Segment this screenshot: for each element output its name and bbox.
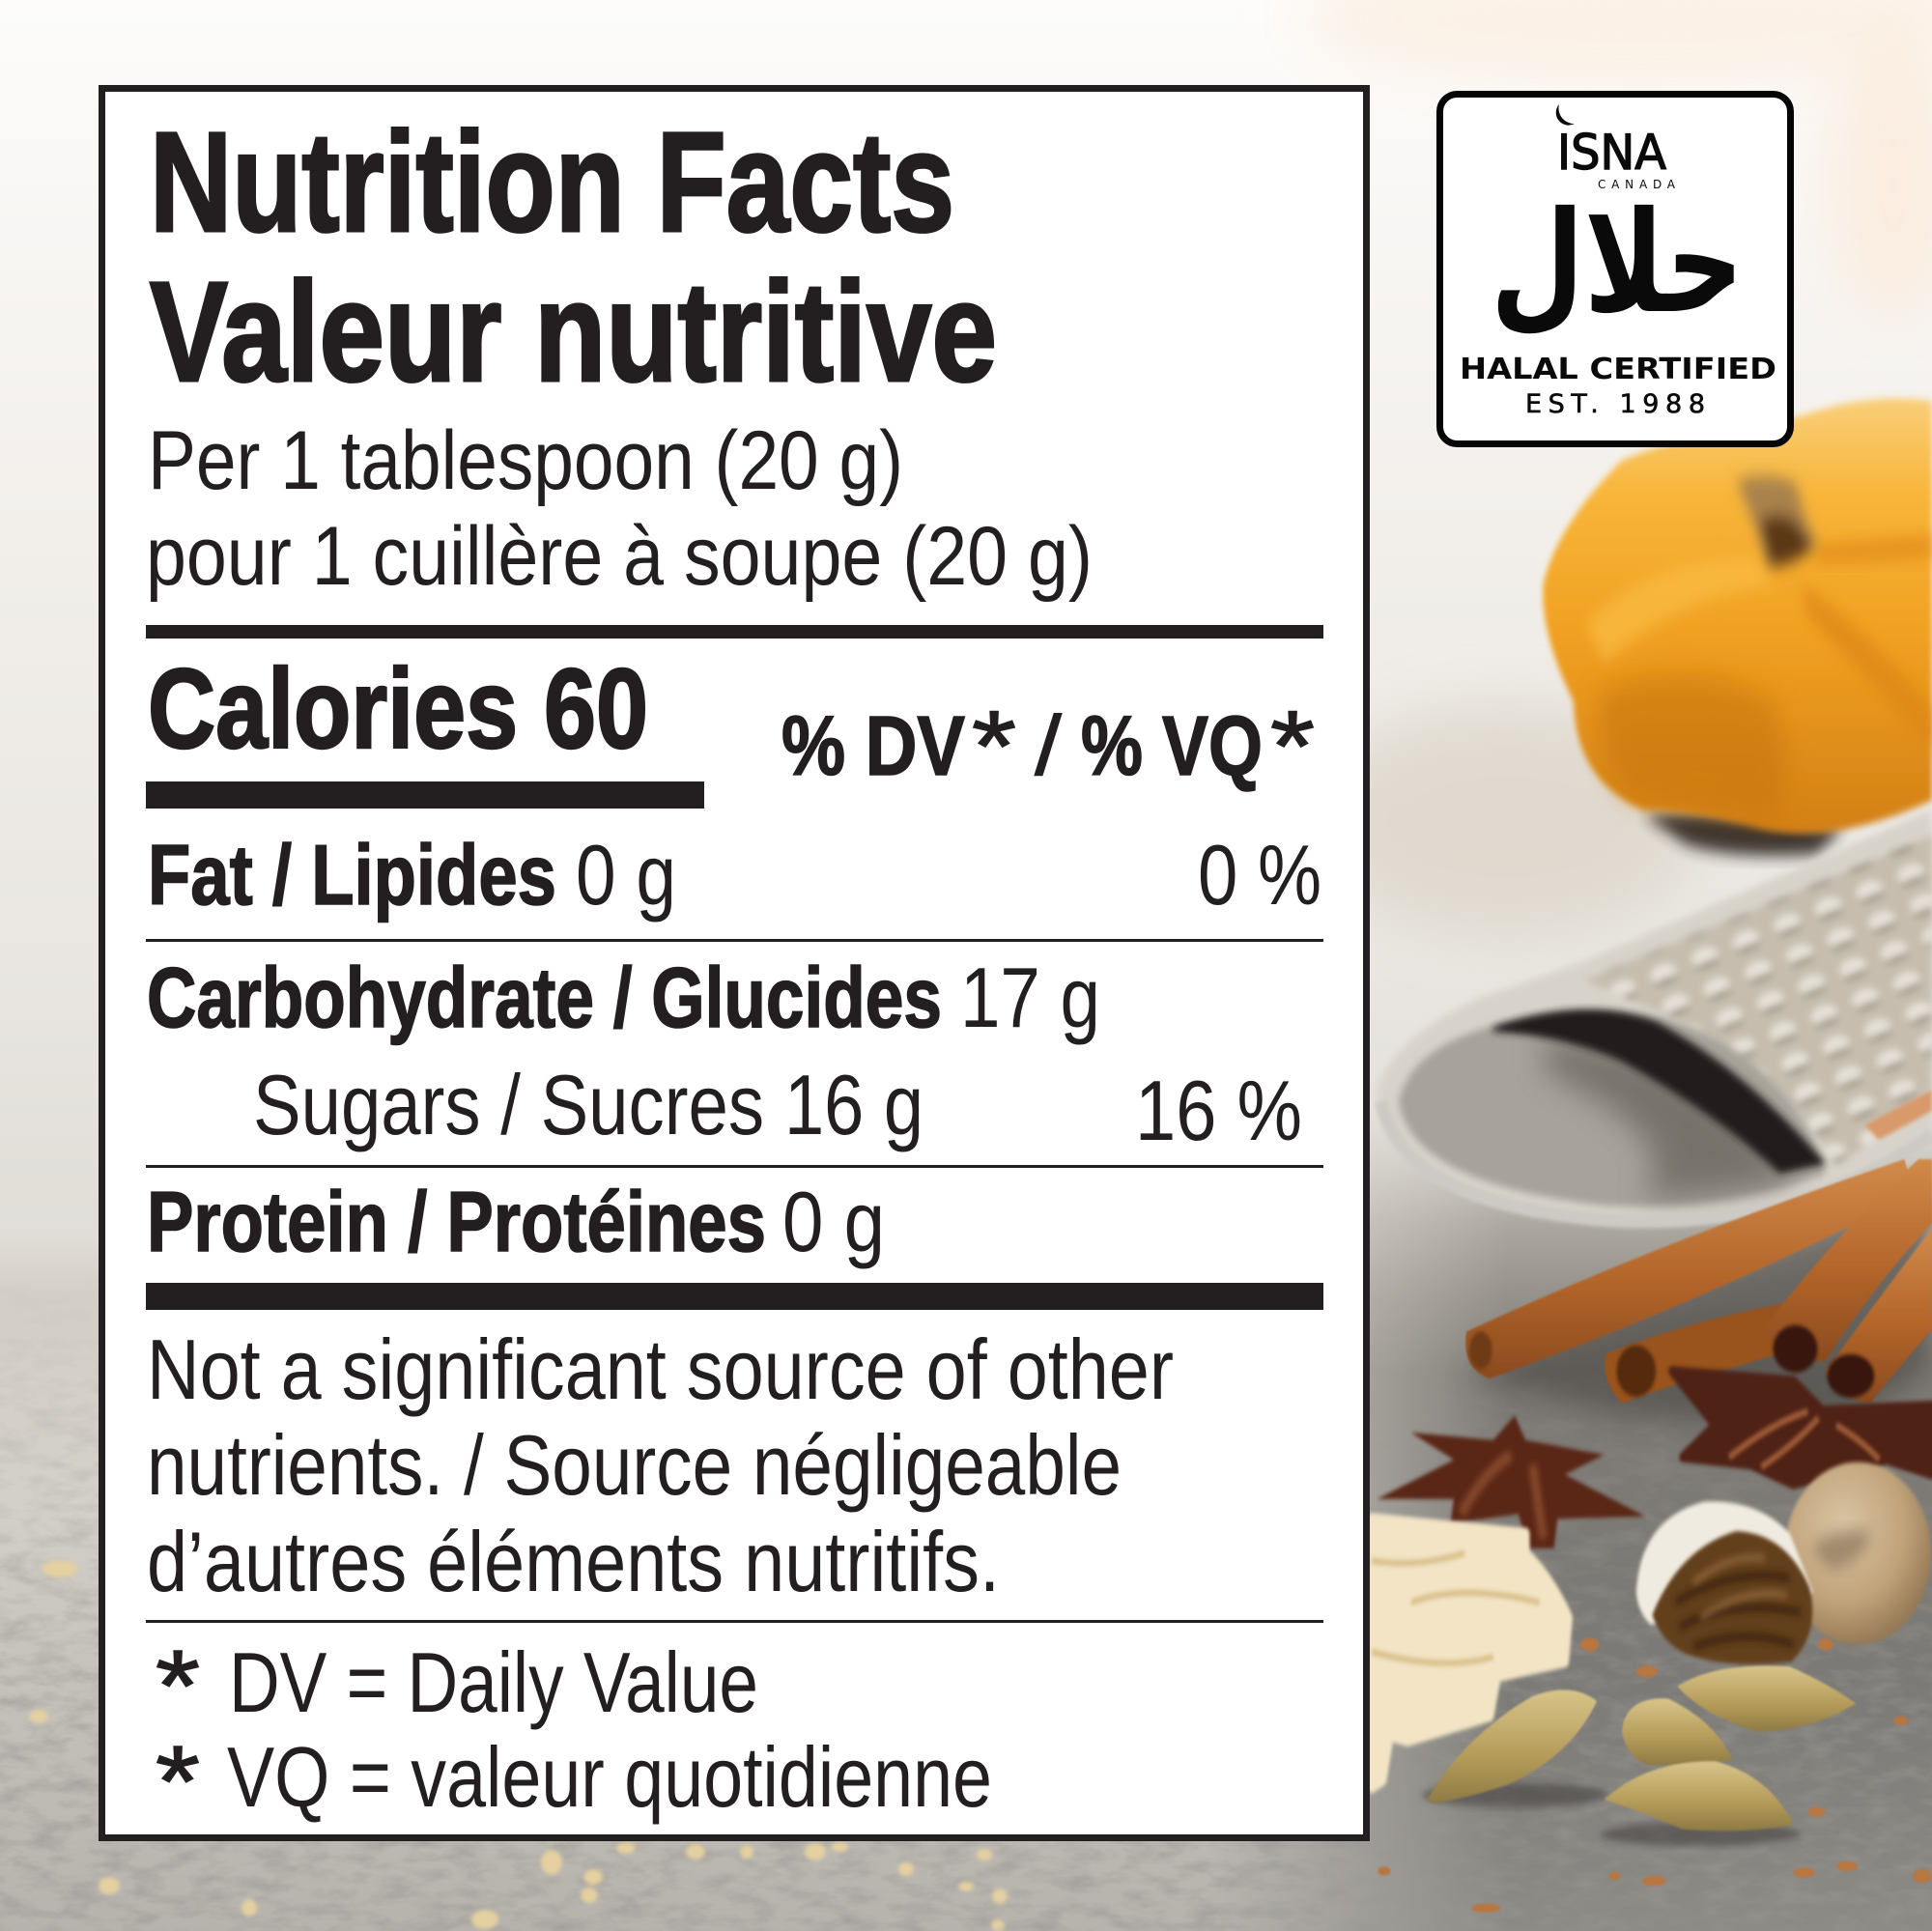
row: fat: 0 g — [576, 827, 676, 923]
footnote: VQ: VQ = valeur quotidienne — [227, 1729, 992, 1825]
calories: Calories 60 — [148, 645, 648, 772]
serving size — [146, 414, 1093, 603]
footnote: DV: * — [156, 1630, 200, 1743]
star anise right — [1672, 1371, 1932, 1485]
daily value header: / — [1035, 699, 1063, 793]
pumpkin stem — [1736, 476, 1818, 568]
row: sugars: Sugars / Sucres — [253, 1057, 764, 1152]
daily value header — [781, 691, 1315, 803]
footnote: DV: DV = Daily Value — [229, 1634, 758, 1730]
heading: nutrition facts: Nutrition Facts — [150, 103, 954, 262]
row: sugars — [253, 1057, 1302, 1158]
row: fat: 0 % — [1198, 827, 1321, 923]
note: not a significant source: d’autres éléments nutritifs. — [147, 1514, 1000, 1609]
cardamom pods — [1422, 1782, 1607, 1807]
daily value header: % VQ — [1081, 699, 1263, 793]
halal certified label: HALAL CERTIFIED — [1460, 353, 1776, 386]
photo: grater — [1377, 809, 1932, 1225]
scattered seeds — [29, 1560, 1008, 1931]
row: sugars: 16 g — [784, 1057, 923, 1152]
daily value header: % DV — [781, 699, 965, 793]
photo: cinnamon and spices — [1372, 1159, 1932, 1913]
daily value header: * — [972, 691, 1016, 803]
photo: pumpkin — [1543, 398, 1932, 856]
daily value header: * — [1270, 691, 1315, 803]
nutmeg whole — [1784, 1462, 1931, 1644]
footnote: VQ: * — [156, 1725, 200, 1838]
grater hollow — [1399, 1010, 1826, 1207]
row: sugars: 16 % — [1135, 1063, 1302, 1158]
serving size: pour 1 cuillère à soupe (20 g) — [146, 510, 1093, 603]
note: not a significant source: Not a significant source of other — [147, 1321, 1174, 1417]
row: fat — [148, 827, 1321, 923]
cinnamon sticks — [1465, 1159, 1915, 1378]
footnote: VQ — [156, 1725, 992, 1838]
icon: crescent — [1556, 104, 1575, 126]
badge: halal certified — [1439, 95, 1791, 444]
serving size: Per 1 tablespoon (20 g) — [148, 414, 903, 507]
footnote: DV — [156, 1630, 758, 1743]
heading: valeur nutritive: Valeur nutritive — [150, 253, 997, 412]
spice specks — [1378, 1637, 1931, 1913]
canada: CANADA — [1598, 178, 1676, 191]
row: fat: Fat / Lipides — [148, 827, 556, 923]
star anise left — [1378, 1415, 1645, 1548]
panel: nutrition facts — [102, 89, 1366, 1838]
row: protein: Protein / Protéines — [147, 1174, 766, 1269]
cookie dough — [1372, 1519, 1569, 1787]
ISNA wordmark: ISNA — [1557, 125, 1666, 181]
note: not a significant source — [147, 1321, 1174, 1609]
note: not a significant source: nutrients. / Source négligeable — [147, 1417, 1122, 1513]
arabic halal: حلال — [1491, 182, 1744, 345]
row: carbohydrate: 17 g — [960, 950, 1100, 1045]
nutmeg half — [1636, 1501, 1813, 1625]
row: protein: 0 g — [782, 1174, 885, 1269]
row: carbohydrate: Carbohydrate / Glucides — [147, 950, 942, 1045]
established date: EST. 1988 — [1525, 389, 1705, 419]
